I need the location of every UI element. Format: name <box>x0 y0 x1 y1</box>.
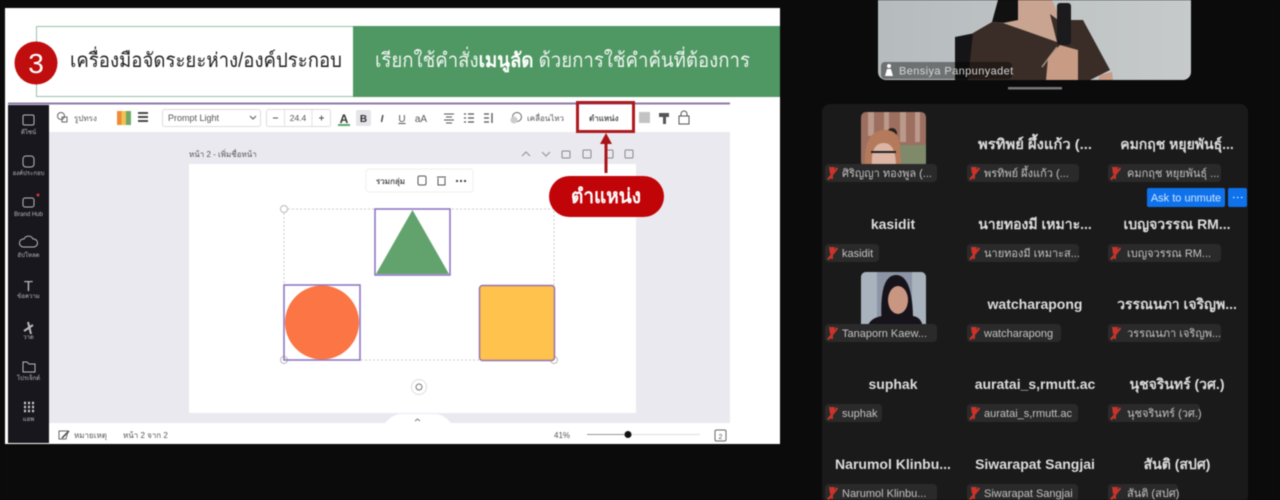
participant name tags: พรทิพย์ ผึ้งแก้ว (... <box>984 165 1069 180</box>
participant names: auratai_s,rmutt.ac <box>975 376 1096 392</box>
participant names: watcharapong <box>987 296 1082 312</box>
editor sidebar: อัปโหลด <box>17 251 40 259</box>
speaker figure <box>955 0 1113 80</box>
page header label: หน้า 2 - เพิ่มชื่อหน้า <box>189 148 257 159</box>
step number badge <box>14 42 58 84</box>
editor toolbar: ตำแหน่ง <box>589 114 619 123</box>
editor sidebar: วาด <box>23 335 34 341</box>
participant name tags: นายทองมี เหมาะส... <box>984 247 1080 260</box>
participant name tags: watcharapong <box>983 328 1053 340</box>
circle shape <box>284 285 360 360</box>
group selection outline <box>280 206 558 364</box>
resize handle <box>1008 87 1062 90</box>
editor sidebar: แอพ <box>23 416 34 423</box>
editor toolbar: U <box>398 114 406 125</box>
participants panel <box>822 104 1248 500</box>
participant name tags: คมกฤช หยุยพันธุ์ ... <box>1127 167 1219 180</box>
slide <box>5 8 780 444</box>
more options button <box>1228 188 1247 207</box>
editor sidebar: ข้อความ <box>17 293 40 300</box>
step number badge: 3 <box>28 48 44 79</box>
header: green instruction banner <box>353 26 780 97</box>
rotate handle <box>412 380 426 394</box>
callout: position <box>549 176 664 217</box>
speaker name tag <box>881 62 1014 79</box>
participant names: คมกฤช หยุยพันธุ์... <box>1120 136 1234 153</box>
status bar: หน้า 2 จาก 2 <box>123 431 168 440</box>
arrow from callout to button <box>600 133 612 173</box>
callout: position: ตำแหน่ง <box>571 186 641 208</box>
participant name tags: suphak <box>842 408 878 420</box>
editor sidebar: โปรเจ็กต์ <box>17 373 40 382</box>
editor toolbar: A <box>340 112 349 126</box>
participant names: วรรณนภา เจริญพ... <box>1117 296 1237 313</box>
participant names: Siwarapat Sangjai <box>975 456 1095 472</box>
page collapse tab <box>385 414 451 423</box>
participant photo: woman with glasses <box>861 112 926 167</box>
ask to unmute button: Ask to unmute <box>1151 192 1221 204</box>
status bar <box>49 423 730 443</box>
editor workspace <box>49 132 730 423</box>
ask to unmute button <box>1147 188 1225 207</box>
participant photo: woman with long hair <box>861 272 926 327</box>
participant name tags: auratai_s,rmutt.ac <box>984 408 1073 420</box>
page header label <box>189 148 633 159</box>
white page <box>189 164 636 413</box>
participant name tags: สันติ (สปศ) <box>1127 488 1179 500</box>
status bar: 41% <box>554 431 570 440</box>
participant names: สันติ (สปศ) <box>1144 456 1210 472</box>
participant name tags <box>825 164 1221 500</box>
editor sidebar <box>8 105 49 443</box>
participant names <box>835 133 1237 472</box>
editor sidebar: T <box>24 278 33 295</box>
participant name tags: Tanaporn Kaew... <box>842 328 927 340</box>
participant names: kasidit <box>871 216 916 232</box>
participant name tags: Narumol Klinbu... <box>842 488 926 500</box>
participant name tags: ศิริญญา ทองพูล (... <box>842 168 932 180</box>
floating group toolbar <box>366 169 473 192</box>
header: tool title box <box>36 26 354 96</box>
square shape <box>480 286 554 360</box>
participant names: suphak <box>868 376 918 392</box>
editor toolbar: เคลื่อนไหว <box>527 112 564 123</box>
editor sidebar: Brand Hub <box>14 212 44 218</box>
participant names: พรทิพย์ ผึ้งแก้ว (... <box>978 133 1092 152</box>
editor toolbar: Prompt Light <box>168 113 220 123</box>
participant names: นุชจรินทร์ (วศ.) <box>1130 376 1224 393</box>
editor toolbar: 24.4 <box>290 113 307 123</box>
header: green instruction banner: เรียกใช้คำสั่งเมนูลัด ด้วยการใช้คำค้นที่ต้องการ <box>375 46 750 74</box>
participant name tags: เบญจวรรณ RM... <box>1127 248 1211 260</box>
triangle shape <box>375 209 450 275</box>
status bar: 2 <box>719 434 723 441</box>
editor toolbar: รูปทรง <box>74 114 97 124</box>
participant name tags: Siwarapat Sangjai <box>984 488 1073 500</box>
participant name tags: นุชจรินทร์ (วศ.) <box>1127 407 1202 420</box>
participant name tags: kasidit <box>842 248 873 260</box>
design editor screenshot <box>8 102 730 443</box>
floating group toolbar: รวมกลุ่ม <box>376 177 405 187</box>
editor sidebar: องค์ประกอบ <box>13 169 45 177</box>
participant name tags: วรรณนภา เจริญพ... <box>1127 328 1221 340</box>
editor sidebar: ดีไซน์ <box>21 128 36 136</box>
editor toolbar: aA <box>415 114 427 125</box>
speaker name tag: Bensiya Panpunyadet <box>899 66 1014 78</box>
editor toolbar: I <box>381 114 384 125</box>
editor toolbar <box>58 110 689 126</box>
status bar: หมายเหตุ <box>74 431 107 440</box>
editor toolbar: B <box>360 114 367 125</box>
speaker video <box>878 0 1191 80</box>
header: tool title box: เครื่องมือจัดระยะห่าง/องค์ประกอบ <box>70 46 342 72</box>
participant names: เบญจวรรณ RM... <box>1123 216 1231 233</box>
participant names: Narumol Klinbu... <box>835 456 951 472</box>
highlight box on position button <box>578 102 634 132</box>
participant names: นายทองมี เหมาะ... <box>978 216 1092 232</box>
